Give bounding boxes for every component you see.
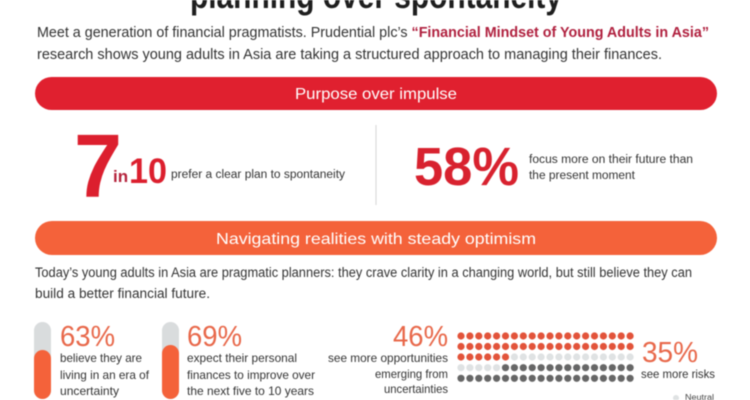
banner: purpose over impulse: Purpose over impulse <box>295 86 457 103</box>
stat: 58%: 58% <box>414 137 519 197</box>
stat: 46%: see more opportunities <box>328 351 448 365</box>
stat: 69% with gauge: the next five to 10 years <box>187 384 314 398</box>
stat: 63% with gauge: uncertainty <box>60 384 119 398</box>
intro text: Meet a generation of financial pragmatists. Prudential plc’s “Financial Mindset of Young Adults in Asia” <box>37 25 709 41</box>
banner: navigating realities <box>35 221 717 255</box>
stat: 63% with gauge: 63% <box>60 321 115 353</box>
stat: 35% <box>641 337 715 381</box>
stat: 63% with gauge: believe they are <box>60 351 142 365</box>
intro text <box>37 25 709 63</box>
stat: 46%: emerging from <box>375 367 448 381</box>
banner: purpose over impulse <box>35 77 717 110</box>
legend: neutral <box>673 393 714 400</box>
dot chart <box>457 332 634 382</box>
stat: 7 in 10: in <box>113 167 128 186</box>
body text <box>35 265 692 301</box>
stat: 7 in 10: 10 <box>129 152 167 191</box>
stat: 63% with gauge: living in an era of <box>60 368 150 382</box>
body text: Today’s young adults in Asia are pragmatic planners: they crave clarity in a changing world, but still believe they can <box>35 265 692 280</box>
stat: 7 in 10: prefer a clear plan to spontaneity <box>171 169 345 181</box>
stat: 46% <box>328 321 448 396</box>
banner: navigating realities: Navigating realities with steady optimism <box>216 231 536 248</box>
stat: 35%: see more risks <box>641 367 715 381</box>
stat: 46%: uncertainties <box>384 382 448 396</box>
stat: 7 in 10: 7 <box>74 117 122 217</box>
stat: 58% <box>414 137 693 197</box>
intro text: research shows young adults in Asia are taking a structured approach to managing their finances. <box>37 47 662 63</box>
stat: 69% with gauge: finances to improve over <box>187 368 315 382</box>
stat: 63% with gauge <box>34 321 150 399</box>
stat: 58%: the present moment <box>529 170 636 182</box>
stat: 7 in 10 <box>74 117 345 217</box>
stat: 69% with gauge <box>162 321 315 399</box>
stat: 35%: 35% <box>642 337 698 369</box>
stat: 58%: focus more on their future than <box>529 154 693 166</box>
stat: 69% with gauge: 69% <box>187 321 242 353</box>
body text: build a better financial future. <box>35 286 210 301</box>
stat: 46%: 46% <box>393 321 448 353</box>
stat: 69% with gauge: expect their personal <box>187 351 297 365</box>
